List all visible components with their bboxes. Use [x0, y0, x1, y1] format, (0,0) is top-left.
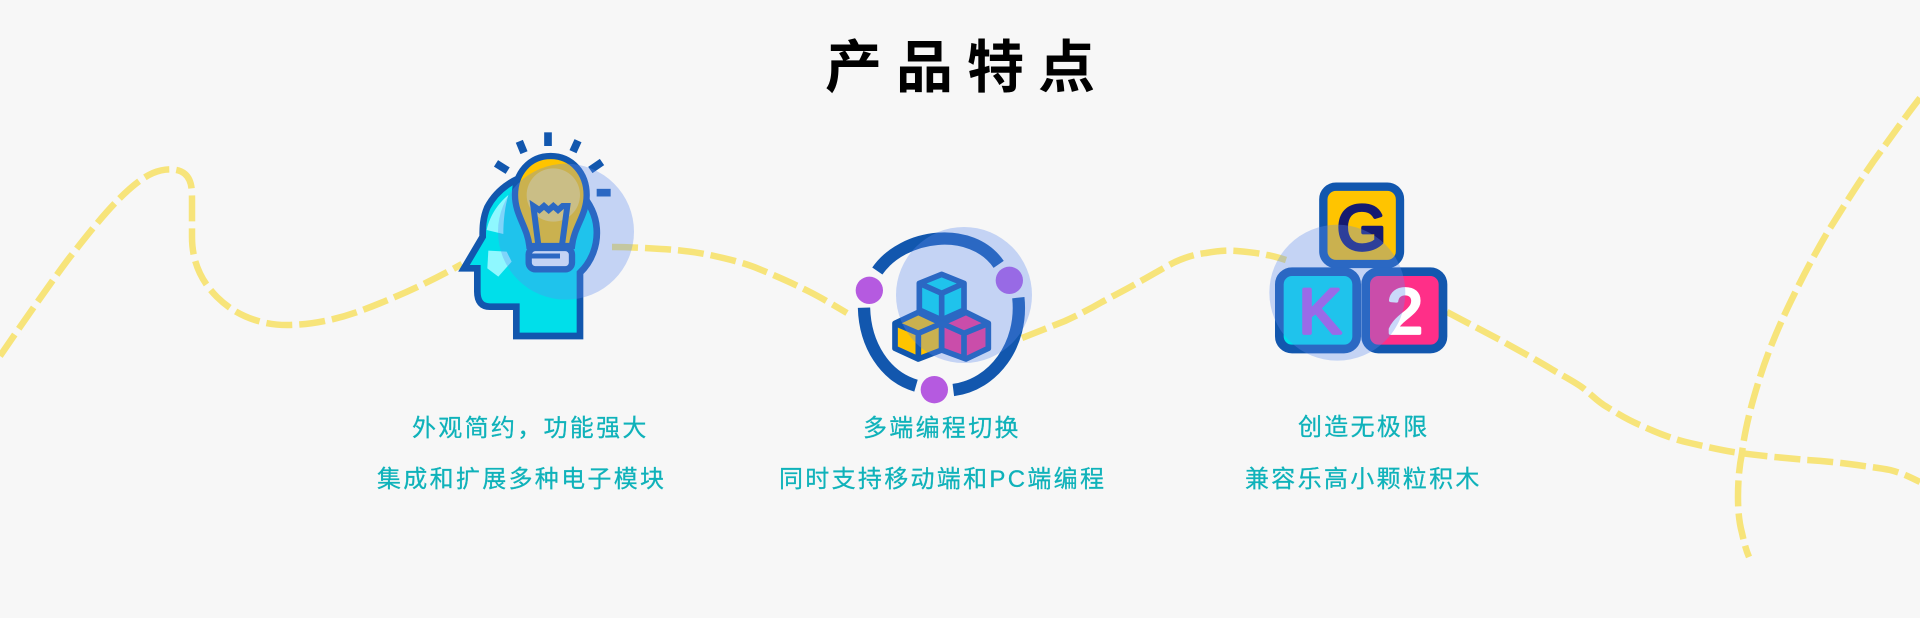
icon: cubes in ring: [856, 227, 1032, 403]
icon: top cube: [919, 274, 964, 320]
icon: translucent circle: [498, 164, 634, 300]
icon: bulb glow: [527, 168, 580, 222]
feature 1 heading: 外观简约，功能强大: [412, 415, 649, 442]
feature 2 description: 同时支持移动端和PC端编程: [779, 466, 1106, 493]
icon: bulb base: [529, 248, 572, 269]
feature 2 heading: 多端编程切换: [863, 415, 1021, 442]
icon: head highlights: [487, 195, 512, 277]
feature 1 description: 集成和扩展多种电子模块: [377, 466, 666, 493]
icon: G block: [1323, 187, 1400, 264]
icon: letter blocks: [1269, 187, 1443, 361]
icon: left cube: [895, 312, 942, 359]
icon: head with light bulb: [464, 132, 634, 336]
title: 产品特点: [825, 36, 1109, 100]
icon: G block: G: [1337, 193, 1386, 263]
icon: 2 block: [1366, 272, 1443, 349]
icon: 2 block: 2: [1387, 277, 1423, 347]
icon: translucent circle: [896, 227, 1032, 363]
icon: K block: K: [1299, 277, 1341, 347]
dashed yellow path: [0, 98, 1920, 557]
icon: purple dots: [856, 267, 1023, 403]
icon: base line: [529, 248, 560, 263]
feature 3 heading: 创造无极限: [1298, 414, 1430, 441]
icon: filament: [533, 206, 567, 245]
feature 3 description: 兼容乐高小颗粒积木: [1245, 466, 1482, 493]
icon: ring arcs: [864, 239, 1019, 390]
icon: K block: [1279, 272, 1357, 349]
icon: rays: [496, 132, 611, 193]
icon: head silhouette: [464, 174, 597, 336]
icon: right cube: [942, 312, 988, 359]
icon: translucent circle: [1269, 225, 1405, 361]
icon: bulb: [515, 156, 587, 246]
